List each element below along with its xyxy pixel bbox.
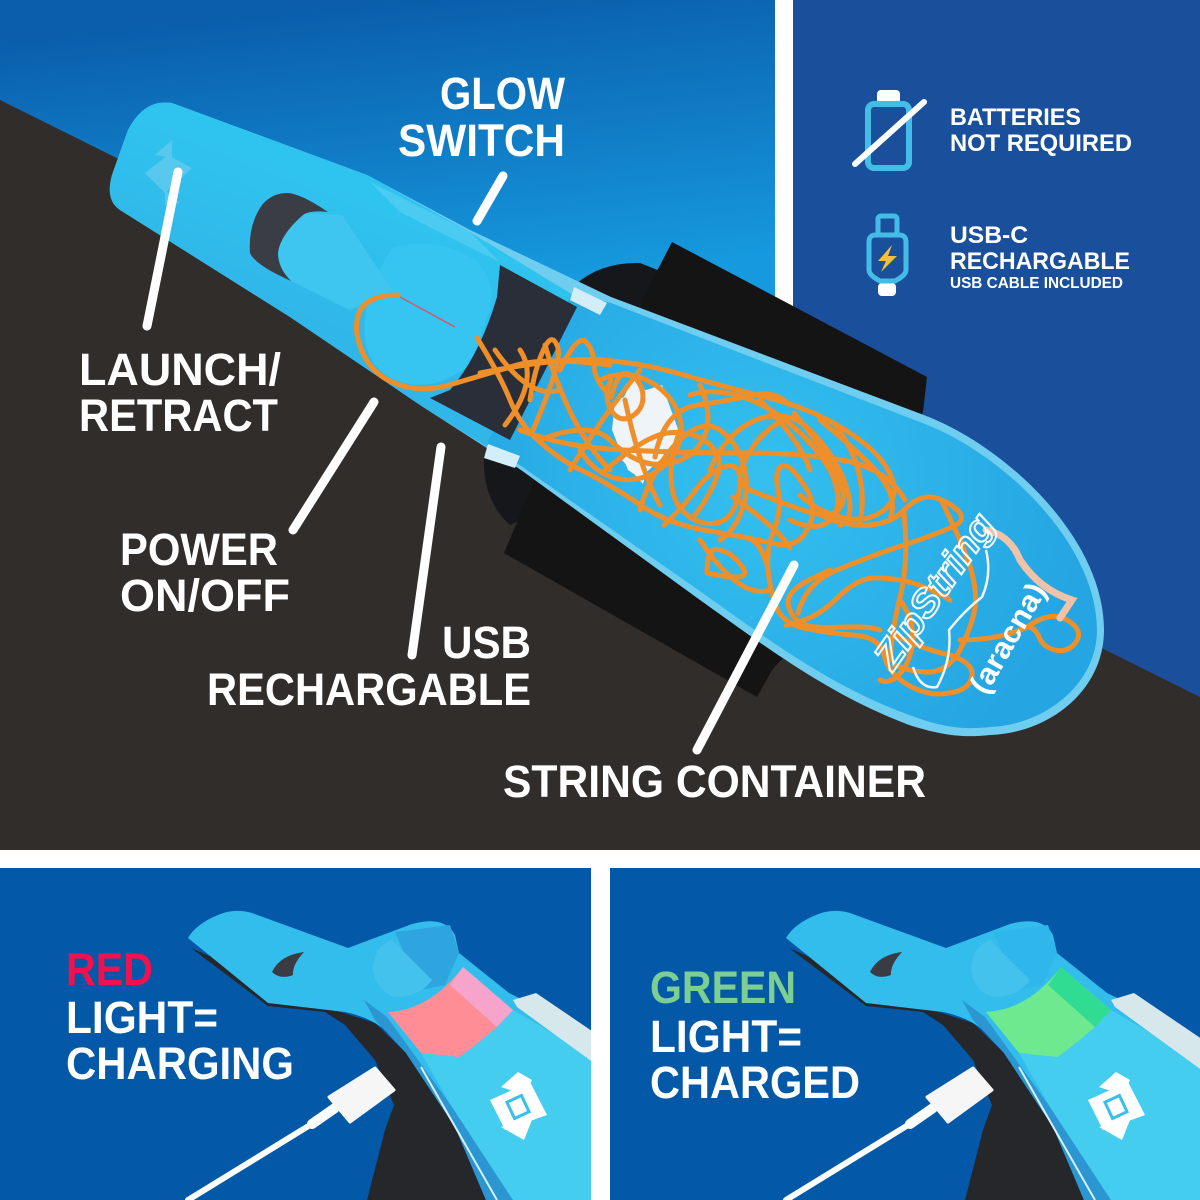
label: glow switch: GLOW bbox=[440, 68, 565, 119]
icon: launch retract logo embossed bbox=[145, 140, 192, 205]
clear edge bbox=[513, 993, 591, 1061]
label: glow switch: SWITCH bbox=[398, 115, 565, 166]
body bbox=[786, 910, 1152, 1200]
icon: faint logo behind string bbox=[612, 375, 682, 484]
icon: no batteries bbox=[855, 90, 924, 168]
text: USB-C rechargable: USB CABLE INCLUDED bbox=[950, 275, 1123, 292]
text: batteries not required bbox=[950, 104, 1132, 157]
label: usb rechargable: USB bbox=[442, 617, 531, 668]
charger cable bbox=[786, 1108, 933, 1200]
clear window clips bbox=[570, 287, 607, 315]
cable connector bbox=[329, 1068, 394, 1122]
power slider groove bbox=[278, 213, 392, 310]
body side edge bbox=[364, 1000, 513, 1200]
heading: red light charging bbox=[68, 954, 292, 1080]
panel: green light charged bbox=[610, 868, 1200, 1200]
heading: red light charging: CHARGING bbox=[66, 1038, 294, 1089]
clear edge bbox=[1111, 993, 1200, 1069]
panel: batteries and USB info bbox=[793, 0, 1200, 720]
label: usb rechargable: RECHARGABLE bbox=[207, 664, 531, 715]
label: launch retract bbox=[79, 344, 281, 441]
callout line: string container bbox=[697, 565, 794, 750]
switch slot bbox=[395, 925, 459, 990]
icon: USB-C charging bbox=[869, 216, 906, 296]
text: USB-C rechargable: RECHARGABLE bbox=[950, 248, 1130, 275]
glow switch cap bbox=[364, 244, 492, 385]
heading: green light charged: LIGHT= bbox=[650, 1011, 802, 1062]
logo swoosh bbox=[913, 550, 988, 687]
callout line: glow switch bbox=[477, 176, 503, 221]
peach string section bbox=[986, 530, 1072, 618]
icon: logo on body bbox=[490, 1072, 547, 1140]
aracna logo: (aracna) bbox=[963, 577, 1053, 700]
crescent opening bbox=[870, 952, 902, 977]
heading: green light charged bbox=[652, 971, 858, 1098]
label: glow switch bbox=[398, 68, 565, 166]
icon: logo on body bbox=[1088, 1072, 1145, 1140]
string container bbox=[487, 293, 1097, 728]
orange string bbox=[356, 295, 1079, 694]
heading: green light charged: CHARGED bbox=[650, 1057, 860, 1108]
red glow window bbox=[388, 967, 513, 1057]
label: launch retract: RETRACT bbox=[79, 390, 278, 441]
lower velcro strap bbox=[504, 480, 790, 697]
label: usb rechargable bbox=[207, 617, 531, 715]
dark underside bbox=[789, 948, 1088, 1200]
panel: red light charging bbox=[0, 868, 620, 1200]
switch cap bbox=[971, 940, 1030, 997]
label: launch retract: LAUNCH/ bbox=[79, 344, 281, 395]
upper body highlight bbox=[370, 182, 500, 262]
switch slot bbox=[1044, 925, 1057, 952]
label: string container: STRING CONTAINER bbox=[503, 756, 926, 807]
black mount hardware bbox=[484, 263, 670, 525]
callout line: power bbox=[293, 402, 374, 530]
heading: red light charging: RED bbox=[66, 944, 153, 995]
body side edge bbox=[962, 1000, 1111, 1200]
heading: green light charged: GREEN bbox=[650, 962, 796, 1013]
text: USB-C rechargable bbox=[950, 222, 1130, 292]
trigger opening bbox=[250, 193, 328, 281]
launcher body bbox=[110, 103, 1104, 736]
cavity bbox=[430, 265, 577, 440]
label: power: POWER bbox=[120, 524, 278, 575]
switch cap bbox=[373, 940, 432, 997]
callout line: usb bbox=[412, 447, 441, 655]
panel: dark diagonal background bbox=[0, 100, 1200, 850]
callout line: launch retract bbox=[147, 172, 178, 326]
text: USB-C rechargable: USB-C bbox=[950, 222, 1028, 249]
status LED bbox=[400, 297, 455, 327]
device bbox=[786, 911, 1200, 1200]
dark underside bbox=[191, 948, 490, 1200]
green glow window bbox=[986, 967, 1111, 1057]
text: batteries not required: BATTERIES bbox=[950, 104, 1081, 131]
charger cable bbox=[188, 1108, 335, 1200]
product: ZipString launcher bbox=[110, 103, 1104, 736]
cable connector bbox=[927, 1068, 992, 1122]
panel: blue gradient background bbox=[0, 0, 775, 500]
clear body bbox=[1019, 1010, 1200, 1200]
label: power: ON/OFF bbox=[120, 570, 290, 621]
heading: red light charging: LIGHT= bbox=[66, 992, 218, 1043]
label: power bbox=[120, 524, 290, 621]
ZipString logo: ZipString bbox=[865, 506, 1004, 678]
text: batteries not required: NOT REQUIRED bbox=[950, 130, 1132, 157]
body bbox=[188, 910, 554, 1200]
clear body bbox=[421, 1010, 591, 1200]
crescent opening bbox=[272, 952, 304, 977]
handle bbox=[110, 103, 573, 452]
upper velcro strap bbox=[640, 242, 927, 450]
